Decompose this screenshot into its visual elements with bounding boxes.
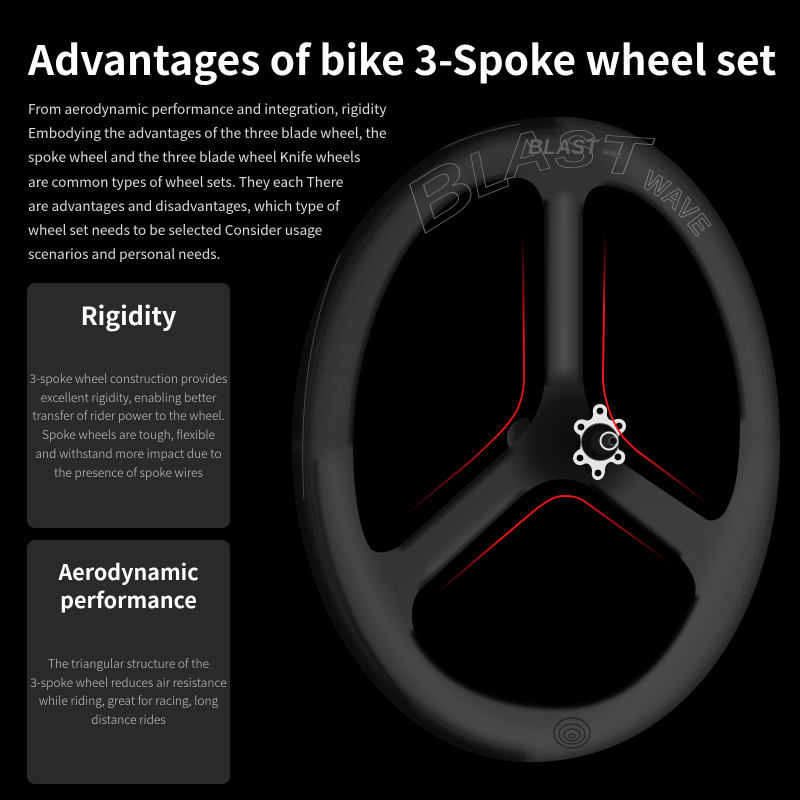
hub with six-bolt disc mount [568,404,626,480]
rim lettering: small logo: WAVE [602,149,623,160]
text: aerodynamic description [30,655,227,728]
text: aerodynamic description: while riding, great for racing, long [39,692,218,709]
rim lettering: BLAST outline: B [389,143,490,247]
text: rigidity description: 3-spoke wheel construction provides [30,370,227,387]
rim lettering: WAVE: WAVE [644,169,712,237]
text: rigidity description: transfer of rider power to the wheel. [32,407,225,424]
text: rigidity description: and withstand more impact due to [35,445,222,462]
panel: rigidity [27,283,230,528]
rim lettering: BLAST outline: L [457,133,518,211]
rear hub flange [507,417,535,452]
text: aerodynamic description: 3-spoke wheel reduces air resistance [30,674,227,691]
hub junction shadow [512,372,634,496]
intro text: wheel set needs to be selected Consider usage [28,219,322,239]
rim lettering: BLAST outline [389,116,656,247]
heading: aerodynamic performance: Aerodynamic [58,556,199,587]
intro text: From aerodynamic performance and integration, rigidity [28,98,386,118]
text: rigidity description: excellent rigidity, enabling better [41,389,216,406]
text: rigidity description: Spoke wheels are tough, flexible [42,426,215,443]
hole edge shading [353,178,517,445]
spoke shading [560,195,568,375]
text: aerodynamic description: distance rides [91,711,166,728]
rim lettering: BLAST outline: S [553,120,597,180]
intro text: are advantages and disadvantages, which type of [28,195,340,215]
wheel body [292,116,780,762]
text: rigidity description [30,370,227,481]
rim lettering: small logo: BLAST [528,136,600,159]
intro text [28,98,387,263]
heading: aerodynamic performance [58,556,199,615]
intro text: spoke wheel and the three blade wheel Knife wheels [28,146,360,166]
intro text: scenarios and personal needs. [28,243,220,263]
text: aerodynamic description: The triangular structure of the [48,655,209,672]
panel: aerodynamic performance [27,540,230,784]
rim shading [292,117,560,445]
rim lettering: BLAST outline: T [596,123,656,188]
intro text: are common types of wheel sets. They each There [28,171,343,191]
red accent line: upper right [603,232,710,505]
heading: rigidity: Rigidity [81,297,176,333]
rim logo [554,718,590,748]
red accent line: upper left [403,232,524,517]
intro text: Embodying the advantages of the three blade wheel, the [28,122,387,142]
illustration: three-spoke wheel [292,117,780,762]
title: Advantages of bike 3-Spoke wheel set [28,28,776,87]
text: rigidity description: the presence of spoke wires [54,464,203,481]
red accent line: lower [437,496,673,593]
heading: aerodynamic performance: performance [60,584,197,615]
rim lettering: BLAST outline: A [491,116,558,192]
